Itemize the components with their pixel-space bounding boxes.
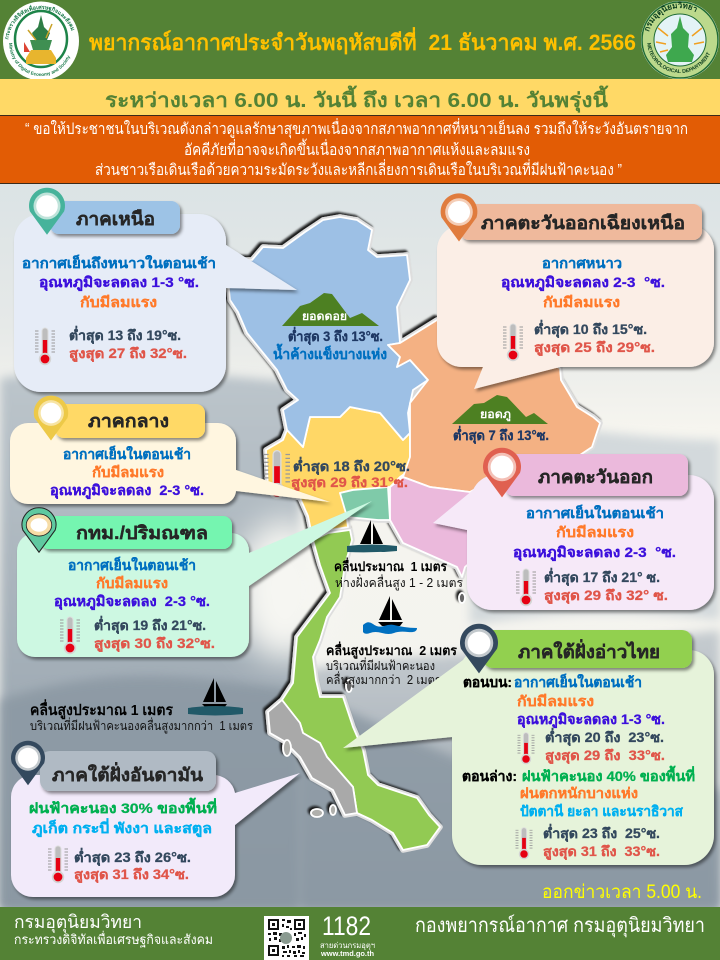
panel: south andaman xyxy=(11,741,300,897)
logo: meteorological department: METEOROLOGICAL DEPARTMENT xyxy=(647,42,710,73)
header: north-east xyxy=(460,204,702,240)
panel: central xyxy=(10,396,330,504)
lower south forecast: ปัตตานี ยะลา และนราธิวาส xyxy=(520,803,683,819)
panel: bangkok and vicinity xyxy=(17,501,372,657)
sea: central gulf waves: บริเวณที่มีฝนฟ้าคะนอง xyxy=(326,657,435,673)
temperatures: upper south: สูงสุด 29 ถึง 33°ซ. xyxy=(545,748,665,764)
temperatures: bangkok xyxy=(94,615,215,652)
QR code xyxy=(264,916,309,960)
temperatures: upper south xyxy=(545,727,665,764)
panel: north-east xyxy=(437,193,714,389)
temperatures: andaman: สูงสุด 31 ถึง 34°ซ. xyxy=(74,867,189,883)
heading: north: ภาคเหนือ xyxy=(76,209,155,229)
thermometer: lower south xyxy=(516,828,532,859)
central map temperatures xyxy=(291,456,410,491)
callout box: north-east xyxy=(437,225,714,389)
region: north-east (orange) xyxy=(388,320,600,492)
forecast text: north: อุณหภูมิจะลดลง 1-3 °ซ. xyxy=(39,274,199,291)
temperatures: north: สูงสุด 27 ถึง 32°ซ. xyxy=(69,346,187,362)
region: bangkok (teal) xyxy=(340,487,390,520)
region: south gulf (green) xyxy=(282,530,440,850)
sea: central gulf waves: คลื่นสูงประมาณ 2 เมตร xyxy=(326,641,457,659)
upper south forecast: อุณหภูมิจะลดลง 1-3 °ซ. xyxy=(517,711,665,728)
forecast text: central: กับมีลมแรง xyxy=(92,464,164,480)
thermometer: east xyxy=(516,569,536,605)
pin: andaman xyxy=(11,741,45,785)
warning text: อัคคีภัยที่อาจจะเกิดขึ้นเนื่องจากสภาพอากาศแห้งและลมแรง xyxy=(184,138,530,159)
islands xyxy=(283,593,465,817)
sea: andaman waves xyxy=(30,678,253,734)
forecast text: bangkok: กับมีลมแรง xyxy=(96,575,168,591)
forecast text: north: กับมีลมแรง xyxy=(80,294,157,310)
panel: north xyxy=(14,188,297,392)
pin: bangkok xyxy=(22,508,56,552)
forecast text: east: อากาศเย็นในตอนเช้า xyxy=(526,504,664,521)
callout box: north xyxy=(14,214,297,392)
hotline number: 1182 xyxy=(322,911,371,941)
central map thermometer xyxy=(264,451,290,498)
heading: south gulf: ภาคใต้ฝั่งอ่าวไทย xyxy=(518,639,660,662)
north-east map temperature: ต่ำสุด 7 ถึง 13°ซ. xyxy=(453,425,549,444)
forecast text: central: อากาศเย็นในตอนเช้า xyxy=(63,445,191,462)
upper south forecast: กับมีลมแรง xyxy=(517,693,594,709)
forecast text: east: กับมีลมแรง xyxy=(556,524,634,540)
logo: ministry of digital economy xyxy=(3,2,79,79)
lower south forecast: ฝนฟ้าคะนอง 40% ของพื้นที่ xyxy=(522,765,695,784)
region: central (yellow) xyxy=(266,407,410,540)
callout box: andaman xyxy=(11,773,300,897)
sea: upper gulf waves xyxy=(334,520,463,591)
label: phu peak: ยอดภู xyxy=(480,409,511,422)
warning text xyxy=(25,118,688,179)
temperatures: bangkok: ต่ำสุด 19 ถึง 21°ซ. xyxy=(94,615,206,634)
forecast text: andaman: ฝนฟ้าคะนอง 30% ของพื้นที่ xyxy=(29,797,217,816)
upper south forecast: อากาศเย็นในตอนเช้า xyxy=(514,673,642,690)
logo: ministry of digital economy: Ministry of Digital Economy and Society xyxy=(9,43,70,76)
header: south gulf xyxy=(483,630,692,668)
forecast period: ระหว่างเวลา 6.00 น. วันนี้ ถึง เวลา 6.00 น. วันพรุ่งนี้ xyxy=(105,85,609,113)
temperatures: lower south: ต่ำสุด 23 ถึง 25°ซ. xyxy=(543,823,660,842)
temperatures: andaman xyxy=(74,847,191,883)
panel: south gulf of Thailand xyxy=(343,624,714,865)
temperatures: bangkok: สูงสุด 30 ถึง 32°ซ. xyxy=(94,636,215,652)
north map frost note: น้ำค้างแข็งบางแห่ง xyxy=(273,343,387,362)
sea: central gulf waves: คลื่นสูงมากกว่า 2 เมตร xyxy=(326,671,441,688)
region: east (pink) xyxy=(390,475,500,577)
sea: central gulf waves xyxy=(326,596,457,688)
mountain: phu peak xyxy=(452,395,548,424)
callout box: south gulf xyxy=(343,650,714,865)
subtitle band xyxy=(0,79,720,116)
thermometer: north-east xyxy=(503,324,523,360)
panel: east xyxy=(433,448,714,610)
header: andaman xyxy=(40,751,216,791)
temperatures: lower south xyxy=(543,823,660,860)
background: misty mountains xyxy=(0,180,720,910)
header: central xyxy=(55,404,205,438)
department name: กรมอุตุนิยมวิทยา xyxy=(14,912,142,933)
thermometer: north xyxy=(35,328,55,364)
temperatures: north-east: สูงสุด 25 ถึง 29°ซ. xyxy=(534,340,655,356)
logo: meteorological department xyxy=(641,1,719,79)
upper south forecast: ตอนบน: xyxy=(463,674,512,690)
header: north xyxy=(50,201,180,234)
forecast text: north-east xyxy=(501,255,665,310)
heading: andaman: ภาคใต้ฝั่งอันดามัน xyxy=(52,762,204,785)
pin: north-east xyxy=(441,193,477,241)
issue time: ออกข่าวเวลา 5.00 น. xyxy=(542,882,702,903)
north map temperature: ต่ำสุด 3 ถึง 13°ซ. xyxy=(288,326,383,345)
central map temperatures: ต่ำสุด 18 ถึง 20°ซ. xyxy=(293,456,410,475)
forecast text: north: อากาศเย็นถึงหนาวในตอนเช้า xyxy=(22,254,216,271)
logo: ministry of digital economy: กระทรวงดิจิทัลเพื่อเศรษฐกิจและสังคม xyxy=(5,4,74,40)
forecast text: central xyxy=(50,445,204,499)
website: www.tmd.go.th xyxy=(320,949,374,958)
temperatures: lower south: สูงสุด 31 ถึง 33°ซ. xyxy=(543,844,660,860)
label: doi peak: ยอดดอย xyxy=(302,311,347,323)
top banner xyxy=(0,0,720,79)
header: bangkok xyxy=(40,516,232,549)
sea: upper gulf waves: คลื่นประมาณ 1 เมตร xyxy=(334,557,447,574)
forecast text: east xyxy=(513,504,676,561)
temperatures: north-east: ต่ำสุด 10 ถึง 15°ซ. xyxy=(534,319,647,338)
heading: north-east: ภาคตะวันออกเฉียงเหนือ xyxy=(481,213,685,233)
warning text: ส่วนชาวเรือเดินเรือด้วยความระมัดระวังและหลีกเลี่ยงการเดินเรือในบริเวณที่มีฝนฟ้าคะนอง ” xyxy=(95,159,622,179)
heading: east: ภาคตะวันออก xyxy=(538,467,653,487)
region: south andaman (grey) xyxy=(268,700,357,815)
mountain: doi peak xyxy=(282,293,379,326)
temperatures: north xyxy=(69,325,187,362)
temperatures: east: ต่ำสุด 17 ถึง 21° ซ. xyxy=(544,567,660,586)
callout box: central xyxy=(10,423,330,504)
lower south forecast: ตอนล่าง: xyxy=(462,768,517,784)
temperatures: east: สูงสุด 29 ถึง 32° ซ. xyxy=(544,588,668,604)
pin: south gulf xyxy=(460,624,498,673)
heading: central: ภาคกลาง xyxy=(88,411,169,431)
lower south forecast: ฝนตกหนักบางแห่ง xyxy=(520,785,638,801)
temperatures: upper south: ต่ำสุด 20 ถึง 23°ซ. xyxy=(545,727,664,746)
pin: east xyxy=(483,448,521,497)
callout box: east xyxy=(433,475,714,610)
ministry name: กระทรวงดิจิทัลเพื่อเศรษฐกิจและสังคม xyxy=(14,931,213,948)
logo: meteorological department: กรมอุตุนิยมวิทยา xyxy=(645,1,697,32)
forecast text: bangkok xyxy=(54,556,210,610)
sea: upper gulf waves: ห่างฝั่งคลื่นสูง 1 - 2 เมตร xyxy=(335,574,463,591)
forecast text: north-east: อากาศหนาว xyxy=(542,255,622,271)
temperatures: north-east xyxy=(534,319,655,356)
forecast text: central: อุณหภูมิจะลดลง 2-3 °ซ. xyxy=(50,482,204,499)
forecast text: north xyxy=(22,254,216,310)
pin: central xyxy=(34,396,68,441)
forecast text: andaman: ภูเก็ต กระบี่ พังงา และสตูล xyxy=(32,818,212,837)
region: north (blue) xyxy=(226,217,428,447)
lower south forecast xyxy=(462,765,695,819)
upper south forecast xyxy=(463,673,665,728)
temperatures: north: ต่ำสุด 13 ถึง 19°ซ. xyxy=(69,325,181,344)
callout box: bangkok xyxy=(17,501,372,657)
thermometer: bangkok xyxy=(60,617,80,653)
forecast text: andaman xyxy=(29,797,217,837)
hotline caption: สายด่วนกรมอุตุฯ xyxy=(320,941,375,950)
forecast text: bangkok: อุณหภูมิจะลดลง 2-3 °ซ. xyxy=(54,593,210,610)
sea: andaman waves: คลื่นสูงประมาณ 1 เมตร xyxy=(30,699,174,720)
warning band xyxy=(0,116,720,184)
pin: north xyxy=(29,188,65,235)
forecast text: north-east: อุณหภูมิจะลดลง 2-3 °ซ. xyxy=(501,274,665,291)
title: พยากรณ์อากาศประจำวันพฤหัสบดีที่ 21 ธันวาคม พ.ศ. 2566 xyxy=(89,26,636,55)
temperatures: andaman: ต่ำสุด 23 ถึง 26°ซ. xyxy=(74,847,191,866)
forecast text: east: อุณหภูมิจะลดลง 2-3 °ซ. xyxy=(513,544,676,561)
heading: bangkok: กทม./ปริมณฑล xyxy=(76,523,208,543)
thermometer: upper south xyxy=(518,733,534,764)
central map temperatures: สูงสุด 29 ถึง 31°ซ. xyxy=(291,475,408,491)
temperatures: east xyxy=(544,567,668,604)
header: east xyxy=(505,454,688,496)
footer xyxy=(0,907,720,960)
map of Thailand xyxy=(226,217,600,850)
forecast text: bangkok: อากาศเย็นในตอนเช้า xyxy=(68,556,196,573)
sea: andaman waves: บริเวณที่มีฝนฟ้าคะนองคลื่นสูงมากกว่า 1 เมตร xyxy=(30,717,253,734)
forecast text: north-east: กับมีลมแรง xyxy=(543,294,620,310)
thermometer: andaman xyxy=(48,846,68,882)
